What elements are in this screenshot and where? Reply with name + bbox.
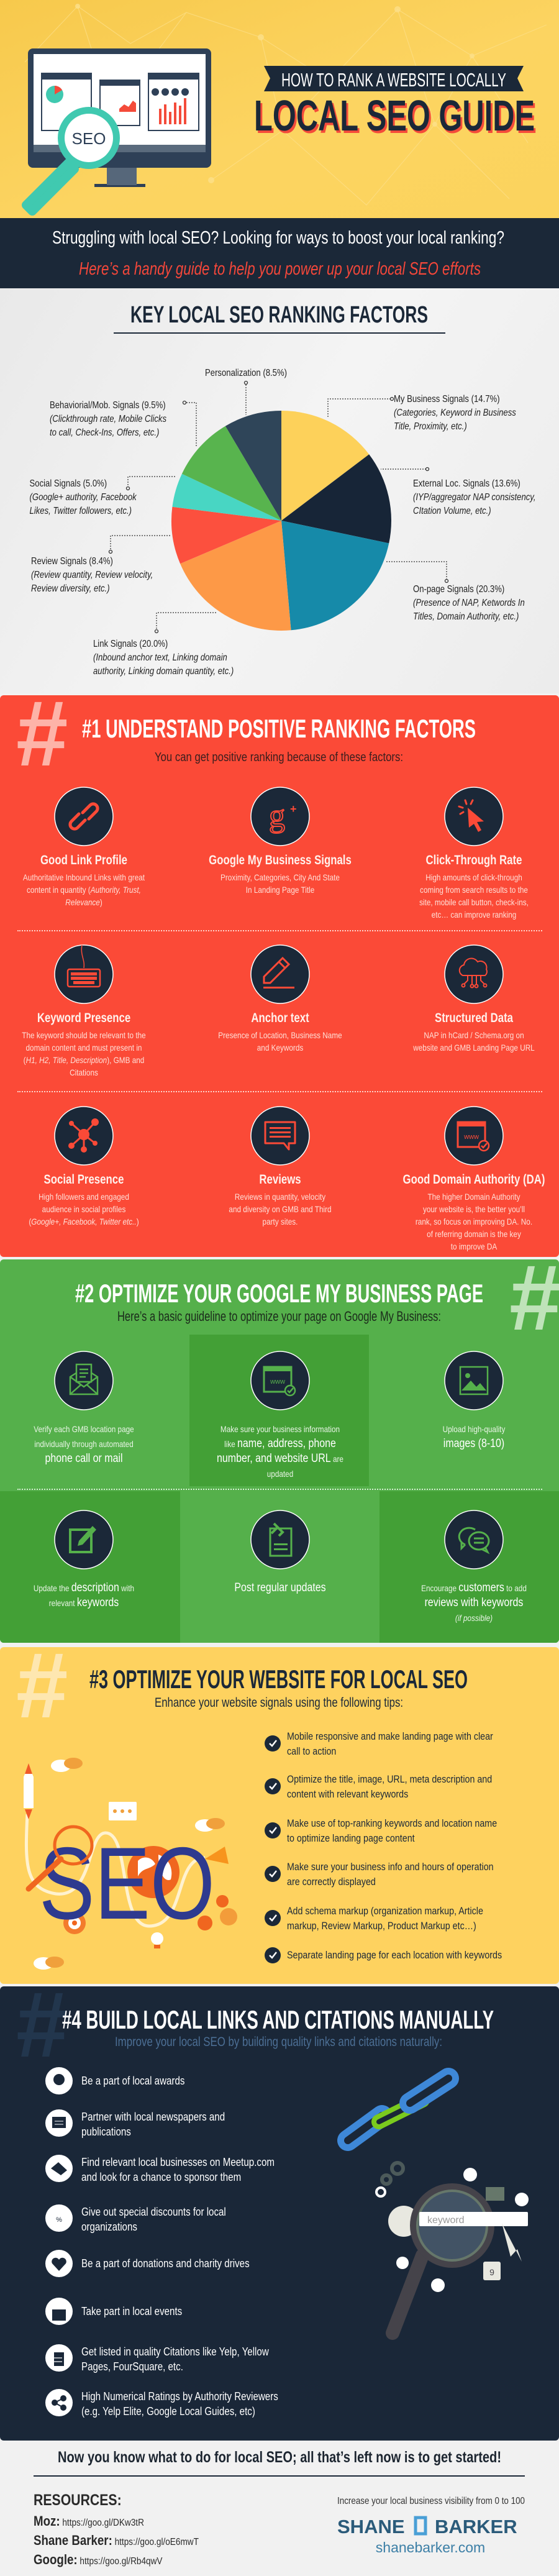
item: social presence: High followers and engaged — [39, 1192, 129, 1202]
panel: #4 build local links: % — [56, 2216, 62, 2224]
resources: Shane Barker: https://goo.gl/oE6mwT — [34, 2533, 199, 2548]
heading: #3 — [89, 1665, 468, 1710]
heading: #1: You can get positive ranking because of these factors: — [155, 751, 403, 764]
item: social presence — [29, 1106, 139, 1226]
item: upload images: images (8-10) — [443, 1437, 504, 1450]
panel: #4 build local links: Take part in local events — [81, 2305, 182, 2318]
item: google my business signals: In Landing Page Title — [246, 885, 314, 895]
checklist: Mobile responsive and make landing page with clear — [287, 1730, 493, 1742]
item: verify location: Verify each GMB location page — [34, 1424, 134, 1434]
item: good link profile — [22, 787, 145, 907]
item: google my business signals: + — [290, 803, 297, 815]
panel: #4 build local links: Give out special discounts for local — [81, 2206, 226, 2218]
pie labels: My Business Signals (14.7%) — [394, 394, 500, 404]
item: reviews — [229, 1106, 332, 1226]
panel: #4 build local links: Partner with local newspapers and — [81, 2111, 225, 2123]
item: business information: Make sure your business information — [220, 1424, 340, 1434]
item: encourage reviews — [421, 1510, 527, 1623]
intro banner — [0, 218, 559, 288]
item: business information: like name, address, phone — [224, 1437, 336, 1450]
pie labels: Social Signals (5.0%) — [30, 478, 107, 489]
resources: Google: https://goo.gl/Rb4qwV — [34, 2552, 162, 2567]
pie labels — [30, 368, 536, 677]
item: business information: number, and website URL are — [217, 1452, 343, 1465]
item: click-through rate: coming from search results to the — [420, 885, 528, 895]
resources — [34, 2492, 199, 2567]
brand logo: shanebarker.com — [376, 2539, 485, 2555]
checklist: call to action — [287, 1745, 336, 1757]
panel: #4 build local links: Find relevant local businesses on Meetup.com — [81, 2156, 275, 2168]
item: verify location: phone call or mail — [45, 1452, 123, 1465]
panel: #3 optimize your website: Make use of top-ranking keywords and location name — [287, 1817, 497, 1829]
brand logo: SHANE — [337, 2516, 405, 2537]
item: reviews: Reviews — [259, 1172, 301, 1187]
item: business information: www — [270, 1378, 285, 1386]
item: good domain authority: rank, so focus on improving DA. No. — [416, 1217, 532, 1226]
item: good domain authority: The higher Domain Authority — [427, 1192, 520, 1202]
pie labels: Behaviorial/Mob. Signals (9.5%) — [50, 400, 166, 411]
item: post regular updates: Post regular updates — [234, 1581, 326, 1594]
item: upload images: Upload high-quality — [443, 1424, 505, 1434]
item: business information: updated — [267, 1469, 293, 1479]
panel: #3 optimize your website — [0, 1647, 559, 1984]
pie labels: authority, Linking domain quantity, etc.) — [93, 666, 234, 677]
item: google my business signals: Proximity, Categories, City And State — [220, 872, 340, 882]
item: keyword presence: (H1, H2, Title, Description), GMB and — [24, 1055, 144, 1065]
item: good domain authority: Good Domain Authority (DA) — [403, 1172, 545, 1187]
illustration: chain and magnifier: 9 — [489, 2267, 494, 2277]
pie labels: (IYP/aggregator NAP consistency, — [413, 492, 536, 503]
item: encourage reviews: Encourage customers to add — [421, 1581, 527, 1594]
pie labels: Personalization (8.5%) — [205, 368, 287, 378]
item: verify location: individually through automated — [34, 1439, 134, 1449]
illustration: monitor with SEO magnifier: SEO — [72, 129, 106, 148]
panel: #2 optimize google my business page — [0, 1259, 559, 1643]
item: upload images — [443, 1351, 506, 1450]
panel: #3 optimize your website: Optimize the title, image, URL, meta description and — [287, 1773, 492, 1785]
item: reviews: Reviews in quantity, velocity — [235, 1192, 325, 1202]
item: social presence: Social Presence — [44, 1172, 124, 1187]
item: update description: relevant keywords — [49, 1596, 119, 1609]
list items — [45, 2067, 184, 2094]
item: structured data: Structured Data — [435, 1011, 513, 1025]
item: click-through rate: site, mobile call button, check-ins, — [419, 897, 529, 907]
heading: #1 — [82, 714, 476, 764]
heading: #3: Enhance your website signals using the following tips: — [155, 1696, 403, 1710]
header: yellow hero — [0, 0, 559, 218]
panel: #1 understand positive ranking factors: Citations — [70, 1067, 98, 1077]
pie labels: to call, Check-Ins, Offers, etc.) — [50, 427, 159, 438]
heading: #4 — [62, 2005, 494, 2049]
panel: #4 build local links: Pages, FourSquare, etc. — [81, 2360, 183, 2373]
hash mark: # — [16, 1972, 68, 2076]
panel: #3 optimize your website: Make sure your business info and hours of operation — [287, 1861, 494, 1873]
item: good link profile: Relevance) — [65, 897, 102, 907]
item: anchor text: and Keywords — [257, 1043, 303, 1053]
panel: #4 build local links: publications — [81, 2126, 131, 2138]
pie labels: Review Signals (8.4%) — [31, 556, 113, 567]
pie labels: (Review quantity, Review velocity, — [31, 570, 153, 580]
illustration: SEO letters — [24, 1758, 237, 1970]
panel: #3 optimize your website: markup, Review Markup, Product Markup etc…) — [287, 1920, 476, 1932]
item: reviews: and diversity on GMB and Third — [229, 1204, 332, 1214]
pie labels: (Presence of NAP, Ketwords In — [413, 598, 525, 608]
pie labels: Titles, Domain Authority, etc.) — [413, 611, 519, 622]
item: good link profile: content in quantity (Authority, Trust, — [27, 885, 141, 895]
item: social presence: audience in social profiles — [42, 1204, 125, 1214]
panel: #4 build local links: and look for a chance to sponsor them — [81, 2171, 241, 2183]
pie labels: External Loc. Signals (13.6%) — [413, 478, 520, 489]
item: keyword presence: Keyword Presence — [37, 1011, 130, 1025]
item: anchor text — [218, 944, 342, 1053]
heading: #2 — [75, 1279, 483, 1324]
list items: Be a part of local awards — [81, 2075, 184, 2087]
panel: #1 understand positive ranking factors: of referring domain is the key — [427, 1229, 521, 1239]
item: google my business signals: g — [269, 798, 285, 834]
item: click-through rate — [419, 787, 529, 920]
panel: #4 build local links: (e.g. Yelp Elite, Google Local Guides, etc) — [81, 2405, 255, 2418]
title banner — [255, 66, 537, 137]
panel: key local SEO ranking factors — [0, 288, 559, 693]
hash mark: # — [16, 1633, 68, 1737]
item: update description — [34, 1510, 134, 1609]
pie labels: (Google+ authority, Facebook — [30, 492, 137, 503]
item: good domain authority: www — [463, 1133, 479, 1141]
item: encourage reviews: reviews with keywords — [425, 1596, 523, 1609]
panel: #3 optimize your website: Add schema markup (organization markup, Article — [287, 1905, 483, 1917]
panel: #3 optimize your website: are correctly displayed — [287, 1876, 376, 1888]
pie labels: (Clickthrough rate, Mobile Clicks — [50, 414, 167, 424]
item: keyword presence: The keyword should be relevant to the — [22, 1030, 146, 1040]
item: update description: Update the description with — [34, 1581, 134, 1594]
panel: #4 build local links: organizations — [81, 2221, 137, 2233]
panel: #1 understand positive ranking factors — [0, 695, 559, 1257]
pie labels: Title, Proximity, etc.) — [394, 421, 467, 432]
pie labels: CItation Volume, etc.) — [413, 506, 491, 516]
item: click-through rate: Click-Through Rate — [426, 853, 522, 867]
panel: #3 optimize your website: Separate landing page for each location with keywords — [287, 1949, 502, 1961]
item: social presence: (Google+, Facebook, Twitter etc..) — [29, 1217, 139, 1226]
panel: #3 optimize your website: to optimize landing page content — [287, 1832, 415, 1844]
item: reviews: party sites. — [263, 1217, 298, 1226]
item: verify location — [34, 1351, 134, 1465]
heading: key factors: KEY LOCAL SEO RANKING FACTORS — [130, 302, 428, 328]
item: good domain authority — [403, 1106, 545, 1251]
item: anchor text: Presence of Location, Business Name — [218, 1030, 342, 1040]
item: anchor text: Anchor text — [251, 1011, 309, 1025]
panel: #4 build local links: Get listed in quality Citations like Yelp, Yellow — [81, 2345, 269, 2358]
panel: #4 build local links — [0, 1986, 559, 2441]
illustration: monitor with SEO magnifier — [22, 48, 211, 216]
item: encourage reviews: (if possible) — [455, 1613, 493, 1623]
pie labels: Likes, Twitter followers, etc.) — [30, 506, 132, 516]
resources: RESOURCES: — [34, 2492, 122, 2509]
heading: #2: Here’s a basic guideline to optimize your page on Google My Business: — [117, 1309, 441, 1324]
item: google my business signals: Google My Business Signals — [209, 853, 352, 867]
item: good link profile: Authoritative Inbound Links with great — [23, 872, 145, 882]
pie labels: Link Signals (20.0%) — [93, 639, 168, 649]
panel: #4 build local links: Be a part of donations and charity drives — [81, 2257, 250, 2270]
item: click-through rate: High amounts of click-through — [425, 872, 522, 882]
pie labels: (Categories, Keyword in Business — [394, 408, 516, 418]
brand logo: BARKER — [435, 2516, 517, 2537]
pie labels: On-page Signals (20.3%) — [413, 584, 504, 595]
panel: #1 understand positive ranking factors: to improve DA — [451, 1241, 497, 1251]
illustration: chain and magnifier — [337, 2068, 529, 2340]
resources: Moz: https://goo.gl/DKw3tR — [34, 2513, 144, 2529]
item: structured data: NAP in hCard / Schema.org on — [424, 1030, 524, 1040]
checklist — [265, 1730, 493, 1757]
brand logo — [337, 2496, 525, 2555]
item: good domain authority: your website is, the better you’ll — [423, 1204, 525, 1214]
hash mark: # — [16, 681, 68, 785]
item: structured data: website and GMB Landing Page URL — [413, 1043, 535, 1053]
item: structured data — [413, 944, 535, 1053]
panel: #1 understand positive ranking factors: etc… can improve ranking — [432, 910, 516, 920]
panel: #3 optimize your website: content with relevant keywords — [287, 1788, 408, 1800]
item: google my business signals — [209, 787, 352, 895]
pie labels: Review diversity, etc.) — [31, 583, 110, 594]
item: business information — [217, 1351, 343, 1479]
heading: #4: Improve your local SEO by building quality links and citations naturally: — [115, 2035, 442, 2049]
panel: #4 build local links: High Numerical Ratings by Authority Reviewers — [81, 2390, 278, 2403]
pie labels: (Inbound anchor text, Linking domain — [93, 652, 227, 663]
item: keyword presence — [22, 944, 146, 1077]
pie chart — [171, 411, 391, 631]
item: keyword presence: domain content and must present in — [26, 1043, 142, 1053]
item: good link profile: Good Link Profile — [40, 853, 127, 867]
item: post regular updates — [234, 1510, 326, 1594]
illustration: chain and magnifier: keyword — [427, 2215, 465, 2226]
